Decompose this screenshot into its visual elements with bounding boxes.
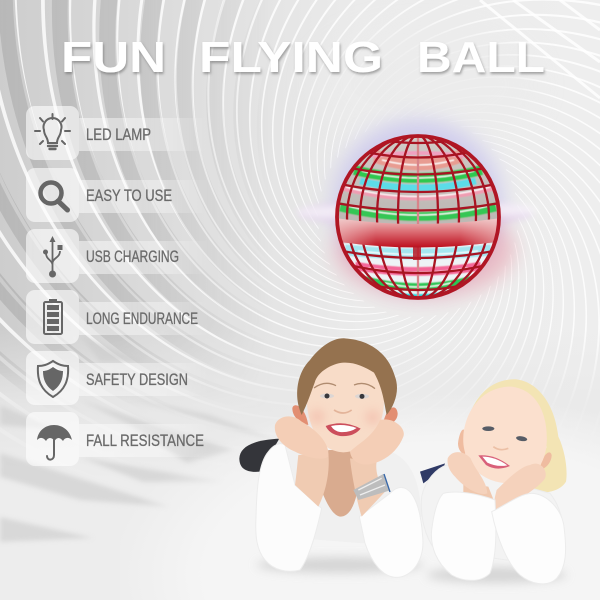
girl right sleeve [492, 493, 566, 584]
icon: magnifier [40, 182, 68, 210]
feature list [26, 106, 209, 466]
title: FLYING [199, 33, 383, 82]
title: BALL [417, 33, 545, 82]
feature: fall resistance [26, 412, 209, 466]
boy cheeks [310, 409, 380, 425]
boy right sleeve [359, 487, 423, 577]
title [61, 33, 545, 82]
feature: USB charging [26, 229, 209, 283]
girl striped trousers [420, 463, 445, 483]
ball cage grid [336, 135, 500, 300]
girl hands [447, 452, 487, 494]
boy [239, 338, 423, 577]
label: FALL RESISTANCE: FALL RESISTANCE [86, 432, 204, 450]
ball light stripes [338, 138, 498, 296]
feature: easy to use [26, 168, 209, 222]
boy hair [297, 338, 397, 415]
ball red band [334, 218, 502, 248]
girl eyes [482, 426, 528, 442]
label: USB CHARGING: USB CHARGING [86, 248, 179, 266]
icon: USB symbol [43, 236, 62, 278]
feature: LED lamp [26, 106, 209, 160]
boy torso [263, 450, 422, 543]
boy eyes [314, 383, 375, 399]
flying ball [296, 120, 539, 305]
girl hair back [467, 379, 567, 493]
icon: battery [44, 299, 62, 334]
icon: light bulb [35, 114, 70, 149]
boy left forearm [295, 453, 329, 507]
icon: shield [38, 361, 68, 397]
ball rim [337, 136, 499, 298]
boy neck and chest [320, 450, 360, 517]
feature: safety design [26, 351, 209, 405]
label: SAFETY DESIGN: SAFETY DESIGN [86, 371, 188, 389]
icon: umbrella [37, 425, 72, 460]
label: LONG ENDURANCE: LONG ENDURANCE [86, 310, 198, 328]
label: LED LAMP: LED LAMP [86, 126, 151, 144]
children photo illustration [239, 338, 567, 584]
girl ears [458, 430, 552, 470]
boy ears [292, 405, 398, 425]
boy shoe [239, 439, 279, 472]
boy smile [326, 423, 361, 436]
boy right forearm [350, 458, 387, 517]
boy watch [353, 474, 390, 500]
girl [420, 379, 567, 584]
girl nose [493, 447, 508, 450]
boy left sleeve [256, 444, 322, 571]
ball glow [296, 120, 539, 298]
feature: long endurance [26, 290, 209, 344]
title: FUN [61, 33, 166, 82]
girl head [463, 387, 547, 483]
girl smile [478, 455, 510, 469]
boy nose [334, 410, 352, 413]
boy hands [275, 416, 328, 459]
girl torso [421, 465, 564, 560]
boy head [307, 358, 384, 452]
label: EASY TO USE: EASY TO USE [86, 187, 172, 205]
girl left sleeve [431, 492, 496, 580]
floor shadow [257, 557, 567, 583]
girl wrists [463, 483, 520, 512]
